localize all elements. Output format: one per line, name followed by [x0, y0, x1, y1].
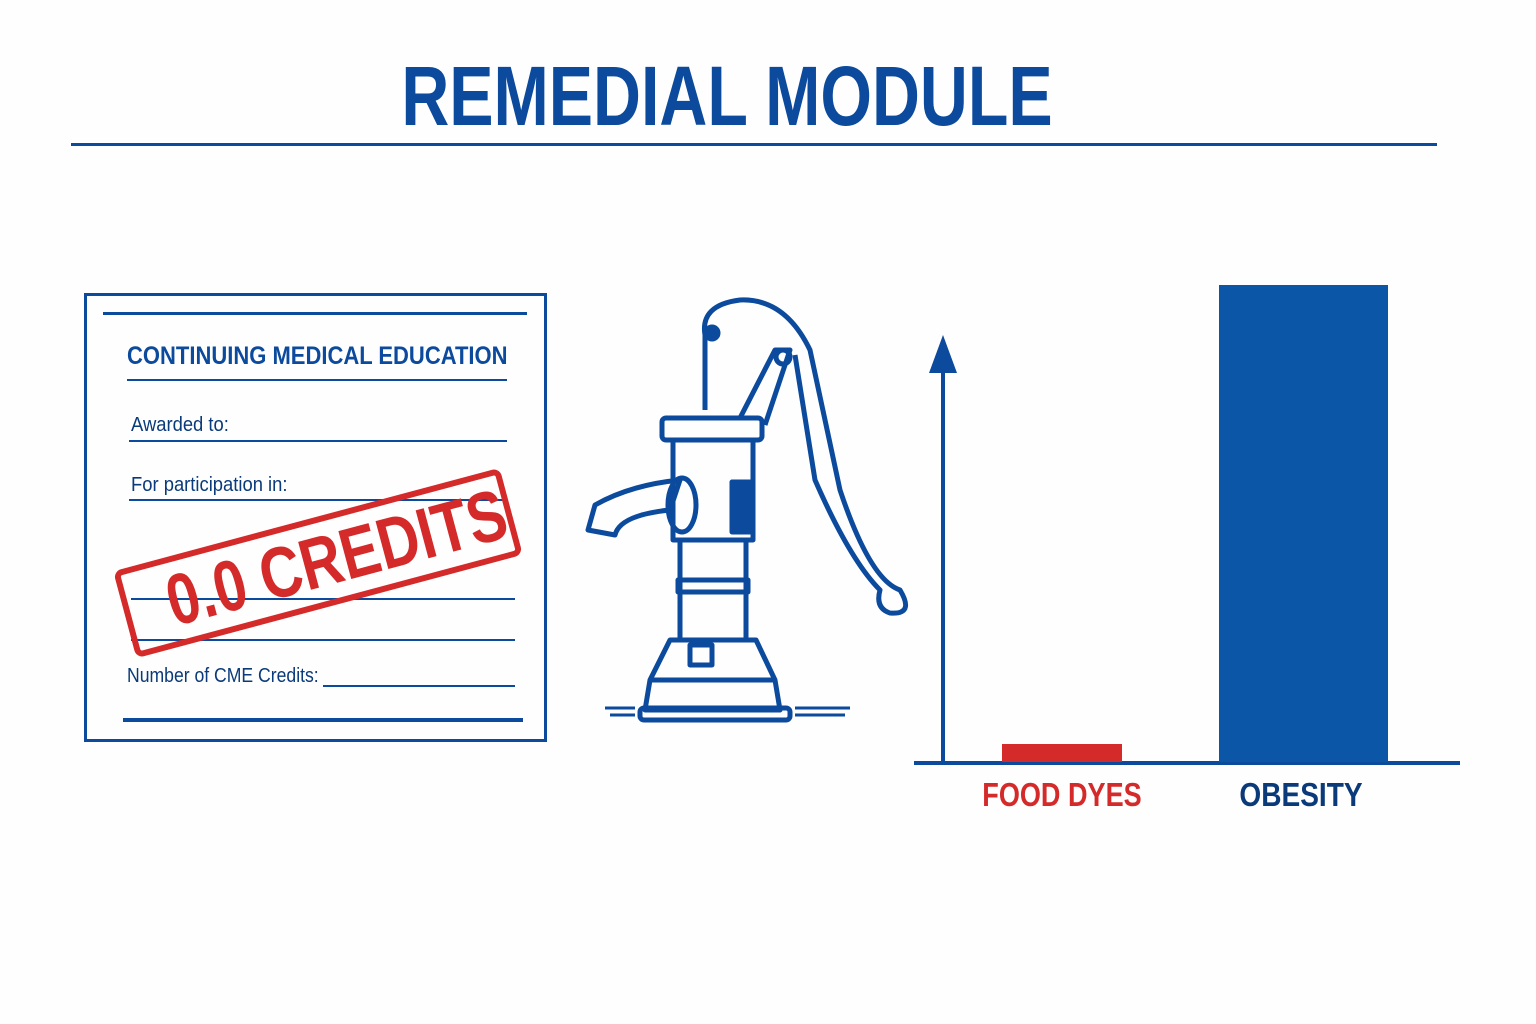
- y axis arrow: [914, 335, 1460, 765]
- title: REMEDIAL MODULE: [401, 49, 1053, 143]
- label: obesity: OBESITY: [1239, 776, 1363, 813]
- certificate heading: CONTINUING MEDICAL EDUCATION: [127, 342, 508, 370]
- bar chart: [914, 285, 1460, 813]
- bar: food dyes: [1002, 744, 1122, 762]
- stamp: 0.0 credits: 0.0 CREDITS: [158, 474, 515, 642]
- field: participation: For participation in:: [131, 474, 287, 496]
- field: awarded to: Awarded to:: [131, 414, 229, 436]
- field: credits: Number of CME Credits:: [127, 665, 319, 687]
- label: food dyes: FOOD DYES: [982, 776, 1142, 813]
- icon: water pump: [586, 297, 908, 722]
- panel: certificate: [84, 293, 547, 742]
- bar: obesity: [1219, 285, 1388, 762]
